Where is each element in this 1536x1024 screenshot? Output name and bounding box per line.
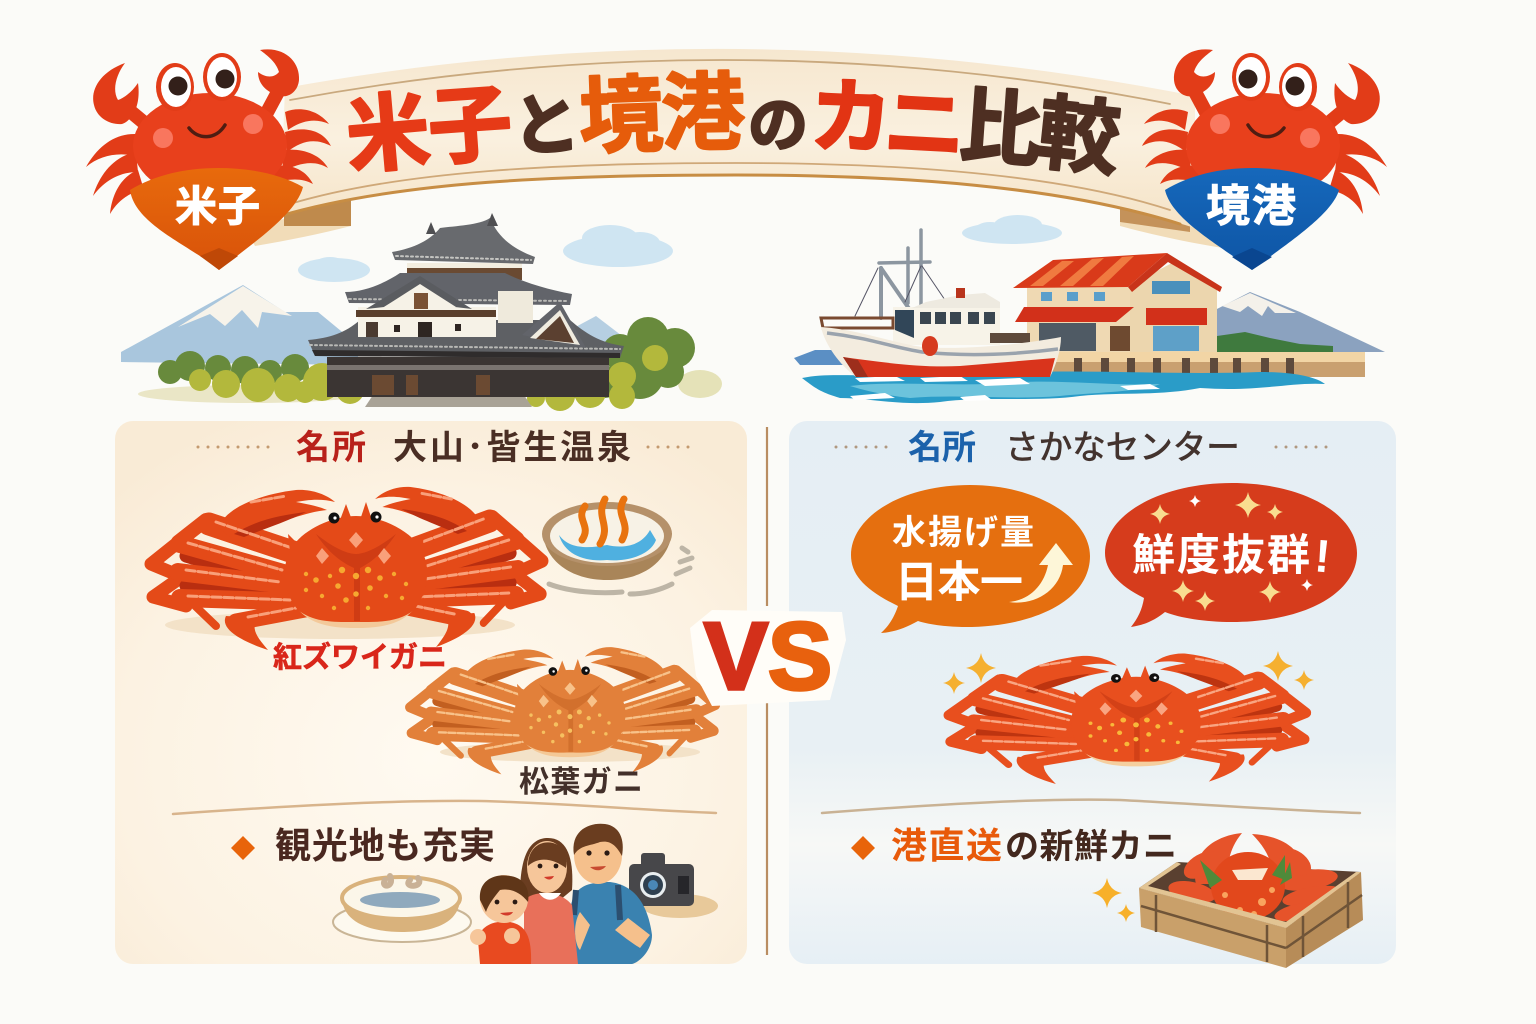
- VS badge: [690, 603, 846, 710]
- trees: [138, 317, 722, 411]
- badge: 米子: 米子: [175, 183, 261, 230]
- callout: 鮮度抜群: !: [1313, 529, 1332, 582]
- scene: Sakaiminato port with boat and market: [794, 215, 1385, 403]
- title: 米子と境港のカニ比較: カ: [808, 72, 893, 165]
- crate with crab: [1139, 833, 1363, 968]
- sparkles around crab: [943, 651, 1314, 694]
- bullet: 港直送の新鮮カニ: 港直送: [891, 825, 1002, 866]
- VS badge: S: [768, 603, 832, 710]
- heading: 名所 大山・皆生温泉: 大山･皆生温泉: [393, 429, 631, 467]
- title: 米子と境港のカニ比較: 較: [1033, 88, 1124, 187]
- label: 紅ズワイガニ: 紅ズワイガニ: [273, 640, 447, 674]
- badge: 米子: [130, 168, 303, 270]
- badge: 境港: [1165, 168, 1339, 270]
- label: 松葉ガニ: 松葉ガニ: [519, 766, 643, 799]
- callout: 水揚げ量日本一: [851, 485, 1090, 633]
- father: [571, 824, 652, 964]
- illustration: family with camera: [470, 824, 718, 964]
- callout: 鮮度抜群: [1105, 483, 1357, 627]
- cloud: [962, 215, 1062, 244]
- callout: 水揚げ量日本一: 水揚げ量: [892, 514, 1034, 552]
- title: 米子と境港のカニ比較: 港: [660, 65, 746, 161]
- crab: 紅ズワイガニ: [151, 487, 543, 650]
- illustration: open-air bath: [333, 876, 471, 942]
- title: 米子と境港のカニ比較: [342, 65, 1124, 187]
- sparkles near crate: [1092, 878, 1135, 922]
- VS badge: V: [704, 603, 768, 710]
- panel: 米子: [115, 421, 747, 964]
- castle: [308, 213, 624, 407]
- crab: 境港: [949, 653, 1306, 784]
- heading: 名所 さかなセンター: 名所: [908, 429, 976, 467]
- heading: 名所 大山・皆生温泉: [198, 429, 697, 467]
- center divider: [766, 427, 768, 955]
- title: 米子と境港のカニ比較: 境: [577, 68, 665, 164]
- mascot crab: 米子: [86, 49, 331, 270]
- mountain: [1215, 292, 1385, 352]
- title: 米子と境港のカニ比較: の: [747, 91, 809, 160]
- mountains: [121, 285, 630, 365]
- child: [470, 875, 531, 964]
- heading: 名所 さかなセンター: [836, 429, 1330, 467]
- badge: 境港: 境港: [1206, 182, 1298, 231]
- panel: 境港: [789, 421, 1396, 968]
- camera: [629, 853, 694, 906]
- sea: [794, 350, 1325, 403]
- market building: [1013, 253, 1222, 352]
- callout: 鮮度抜群: 鮮度抜群: [1132, 532, 1312, 580]
- bullet: 港直送の新鮮カニ: [851, 825, 1177, 866]
- bullet: 港直送の新鮮カニ: の新鮮カニ: [1005, 828, 1177, 866]
- title ribbon banner: [245, 49, 1223, 248]
- title: 米子と境港のカニ比較: 比: [957, 81, 1045, 178]
- title: 米子と境港のカニ比較: ニ: [882, 78, 968, 173]
- heading: 名所 さかなセンター: さかなセンター: [1005, 429, 1240, 467]
- mascot crab: 境港: [1142, 49, 1387, 270]
- bullet: 観光地も充実: 観光地も充実: [275, 825, 495, 866]
- fishing boat: [821, 230, 1061, 377]
- title: 米子と境港のカニ比較: 子: [425, 76, 515, 176]
- arrow: up: [1009, 543, 1073, 603]
- title: 米子と境港のカニ比較: 米: [342, 84, 434, 184]
- title: 米子と境港のカニ比較: と: [510, 86, 582, 166]
- heading: 名所 大山・皆生温泉: 名所: [296, 429, 366, 467]
- scene: Yonago castle with mountains: [121, 213, 722, 411]
- mother: [520, 838, 578, 964]
- pier: [1049, 352, 1365, 377]
- crab: 松葉ガニ: [410, 647, 716, 774]
- clouds: [298, 225, 673, 282]
- icon: hot spring tub: [542, 499, 692, 594]
- callout: 水揚げ量日本一: 日本一: [895, 559, 1023, 607]
